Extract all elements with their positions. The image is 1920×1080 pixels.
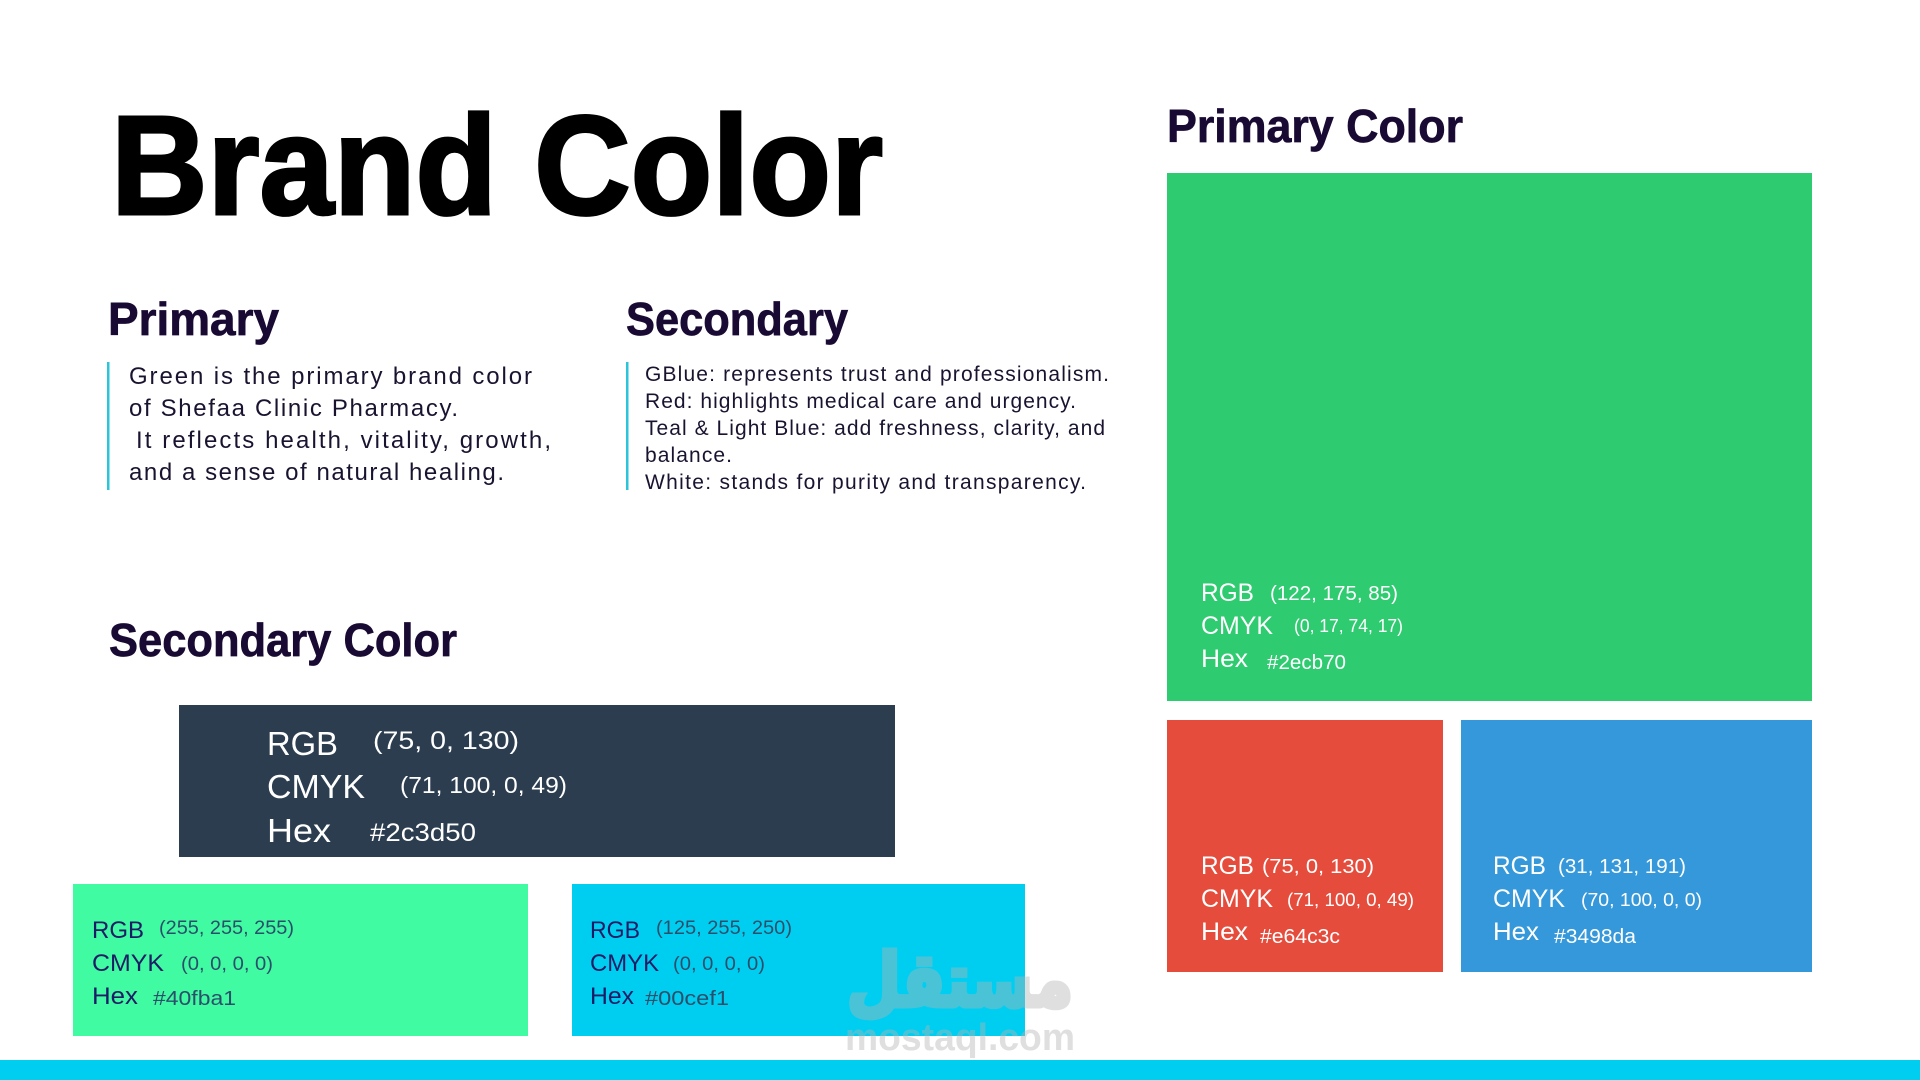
panel: green swatch: RGB <box>1201 579 1254 607</box>
text block: secondary description: Teal & Light Blue: add freshness, clarity, and <box>645 417 1105 440</box>
text block: secondary description: White: stands for purity and transparency. <box>645 471 1086 494</box>
panel: cyan swatch: (125, 255, 250) <box>656 918 792 939</box>
heading: secondary: Secondary <box>626 293 848 345</box>
panel: red swatch: RGB <box>1201 852 1254 880</box>
text block: primary description: of Shefaa Clinic Pharmacy. <box>129 395 458 422</box>
text block: secondary description <box>626 362 1109 494</box>
panel: dark navy swatch: (75, 0, 130) <box>373 727 519 755</box>
panel: dark navy swatch: #2c3d50 <box>370 819 476 847</box>
panel: cyan swatch: CMYK <box>590 950 659 977</box>
panel: mint swatch: RGB <box>92 917 144 944</box>
panel: blue swatch: CMYK <box>1493 885 1565 913</box>
panel: dark navy swatch: RGB <box>267 725 338 762</box>
panel: green swatch: Hex <box>1201 645 1249 673</box>
panel: blue swatch: Hex <box>1493 918 1540 946</box>
panel: cyan swatch: #00cef1 <box>645 988 729 1010</box>
watermark: mostaql.com <box>845 1017 1075 1059</box>
panel: mint swatch: (0, 0, 0, 0) <box>181 954 273 975</box>
text block: primary description: It reflects health, vitality, growth, <box>136 427 551 454</box>
panel: blue swatch <box>1461 720 1812 972</box>
panel: mint swatch: (255, 255, 255) <box>159 918 294 939</box>
text block: primary description: Green is the primary brand color <box>129 363 532 390</box>
panel: mint swatch: Hex <box>92 983 138 1010</box>
panel: dark navy swatch: CMYK <box>267 768 365 805</box>
panel: green swatch: (0, 17, 74, 17) <box>1294 616 1403 636</box>
panel: blue swatch: (70, 100, 0, 0) <box>1581 890 1702 910</box>
text block: secondary description: balance. <box>645 444 732 467</box>
panel: green swatch: CMYK <box>1201 612 1273 640</box>
panel: green swatch: (122, 175, 85) <box>1270 583 1398 605</box>
panel: cyan swatch: RGB <box>590 917 640 944</box>
panel: red swatch: (71, 100, 0, 49) <box>1287 890 1414 910</box>
panel: mint swatch: CMYK <box>92 950 164 977</box>
panel: dark navy swatch <box>179 705 895 857</box>
heading: secondary color: Secondary Color <box>109 614 457 666</box>
watermark: مستقل <box>847 938 1073 1024</box>
panel: cyan swatch: (0, 0, 0, 0) <box>673 954 765 975</box>
panel: blue swatch: RGB <box>1493 852 1546 880</box>
panel: blue swatch: (31, 131, 191) <box>1558 856 1686 878</box>
panel: red swatch <box>1167 720 1443 972</box>
text block: secondary description: GBlue: represents trust and professionalism. <box>645 363 1109 386</box>
heading: primary: Primary <box>108 293 279 345</box>
panel: blue swatch: #3498da <box>1554 926 1637 948</box>
footer bar <box>0 1060 1920 1080</box>
text block: primary description: and a sense of natural healing. <box>129 459 504 486</box>
panel: mint swatch: #40fba1 <box>153 988 236 1010</box>
panel: red swatch: (75, 0, 130) <box>1262 856 1374 878</box>
panel: green swatch <box>1167 173 1812 701</box>
panel: cyan swatch <box>572 884 1025 1036</box>
text block: primary description <box>107 362 551 490</box>
watermark <box>845 938 1075 1059</box>
panel: red swatch: #e64c3c <box>1260 926 1340 948</box>
text block: secondary description: Red: highlights medical care and urgency. <box>645 390 1076 413</box>
panel: red swatch: Hex <box>1201 918 1249 946</box>
panel: cyan swatch: Hex <box>590 983 634 1010</box>
panel: dark navy swatch: Hex <box>267 812 332 849</box>
title: Brand Color <box>111 86 883 244</box>
heading: primary color: Primary Color <box>1167 100 1463 152</box>
panel: dark navy swatch: (71, 100, 0, 49) <box>400 772 567 798</box>
panel: green swatch: #2ecb70 <box>1267 652 1346 674</box>
panel: mint swatch <box>73 884 528 1036</box>
panel: red swatch: CMYK <box>1201 885 1273 913</box>
